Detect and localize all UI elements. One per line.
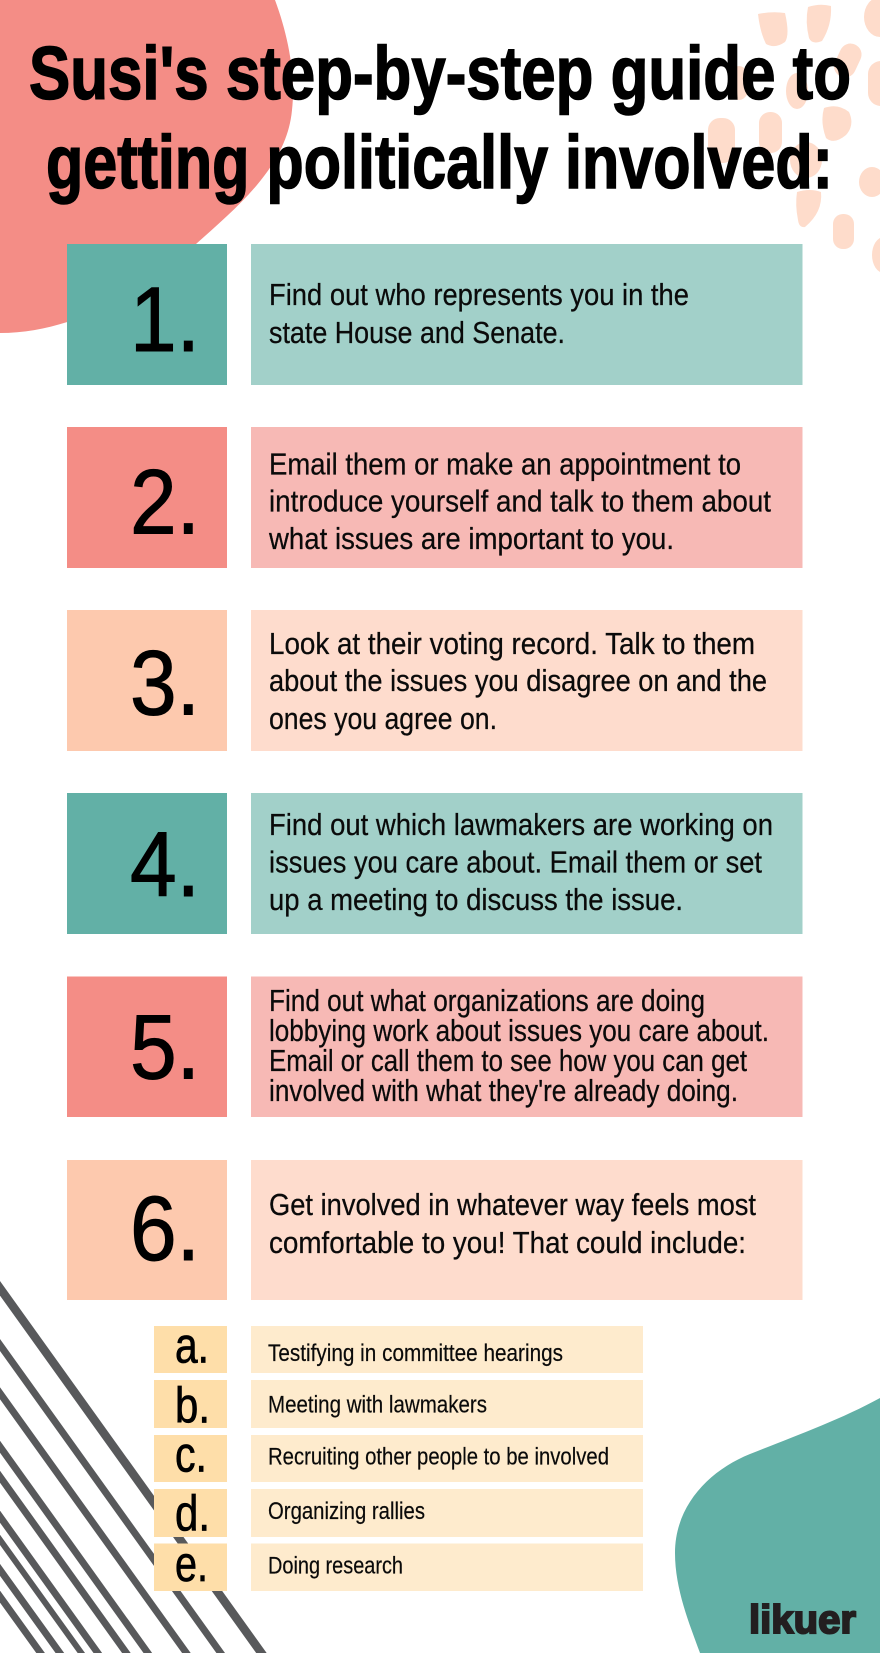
option d: d. [175,1486,210,1542]
option c: c. [175,1426,207,1482]
peach dot pattern top right [708,0,880,273]
option d: Organizing rallies [268,1498,425,1525]
step 6 number: 6. [130,1178,200,1280]
step 3 number: 3. [130,632,200,734]
step 5 text: Find out what organizations are doing [269,983,705,1018]
step 4 number: 4. [130,814,200,916]
step 3 text: Look at their voting record. Talk to them [269,626,755,661]
step 6 text: comfortable to you! That could include: [269,1225,746,1260]
option c: Recruiting other people to be involved [268,1444,609,1470]
step 6 text: Get involved in whatever way feels most [269,1187,756,1222]
step 6 [67,1160,802,1300]
option d [154,1486,643,1542]
step 5 text [251,976,802,1117]
option e [154,1536,643,1592]
step 5 text: lobbying work about issues you care about. [269,1013,769,1048]
option a: a. [175,1318,209,1374]
option b: b. [175,1378,210,1434]
step 2 text [251,427,802,568]
step 5 number [67,976,227,1117]
step 1 number: 1. [130,269,200,371]
step 3 [67,610,802,751]
step 4 text [251,793,802,934]
step 2 number [67,427,227,568]
step 3 text [251,610,802,751]
step 6 number [67,1160,227,1300]
step 5 text: involved with what they're already doing. [269,1073,738,1108]
teal blob bottom right [675,1398,880,1653]
grey diagonal stripes bottom left [0,1274,265,1653]
step 3 text: about the issues you disagree on and the [269,663,767,698]
step 2 [67,427,802,568]
step 3 number [67,610,227,751]
step 4 text: issues you care about. Email them or set [269,844,762,880]
option e: e. [175,1536,208,1592]
step 2 text: what issues are important to you. [268,521,674,556]
step 1 [67,244,802,385]
option b: Meeting with lawmakers [268,1392,487,1418]
step 1 text: state House and Senate. [269,315,565,350]
title [29,31,851,204]
option a: Testifying in committee hearings [268,1340,563,1367]
option e: Doing research [268,1552,403,1580]
logo: likuer [749,1598,856,1642]
option b [154,1378,643,1434]
step 1 text: Find out who represents you in the [269,277,689,312]
step 4 number [67,793,227,934]
step 5 number: 5. [130,996,200,1098]
step 4 text: Find out which lawmakers are working on [269,807,773,842]
step 2 text: introduce yourself and talk to them about [269,484,771,518]
step 1 number [67,244,227,385]
step 3 text: ones you agree on. [269,701,497,736]
step 1 text [251,244,802,385]
step 4 [67,793,802,934]
step 2 text: Email them or make an appointment to [269,446,741,482]
step 5 text: Email or call them to see how you can get [269,1043,747,1078]
step 4 text: up a meeting to discuss the issue. [269,882,683,917]
step 5 [67,976,802,1117]
option a [154,1318,643,1374]
option c [154,1426,643,1482]
coral blob top left [0,0,293,333]
step 6 text [251,1160,802,1300]
step 2 number: 2. [130,452,200,554]
